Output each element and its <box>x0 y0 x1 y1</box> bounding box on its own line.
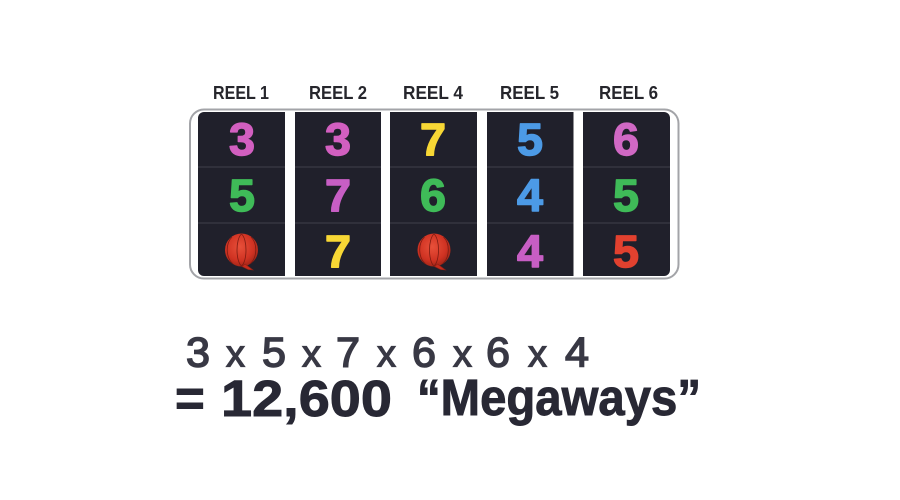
label: reel 2: REEL 2 <box>309 83 367 103</box>
equation: multiplication line: 6 <box>486 328 510 376</box>
label: reel 1: REEL 1 <box>213 83 269 103</box>
equation: multiplication line: x <box>528 334 547 376</box>
equation: multiplication line: x <box>226 334 245 376</box>
equation: multiplication line: x <box>302 334 321 376</box>
panel: reel 5 <box>487 112 574 277</box>
symbol: green 6: 6 <box>420 170 446 221</box>
equation: result line: 12,600 <box>221 370 392 427</box>
icon: red Q ball <box>225 234 258 270</box>
label: reel 5: REEL 5 <box>500 83 559 103</box>
equation: result line <box>175 369 701 427</box>
symbol: pink 3: 3 <box>325 114 351 165</box>
symbol: purple 7: 7 <box>325 170 351 221</box>
symbol: blue 4: 4 <box>517 170 543 221</box>
panel: reel 1 <box>198 112 285 276</box>
label: reel 6: REEL 6 <box>599 83 658 103</box>
equation: result line: “Megaways” <box>417 369 701 426</box>
equation: multiplication line: x <box>453 334 472 376</box>
symbol: blue 5: 5 <box>517 114 543 165</box>
symbol: yellow 7: 7 <box>420 114 446 165</box>
equation: multiplication line <box>186 328 589 376</box>
symbol: green 5: 5 <box>229 170 255 221</box>
equation: multiplication line: x <box>377 334 396 376</box>
equation: multiplication line: 6 <box>412 328 436 376</box>
equation: multiplication line: 5 <box>262 328 286 376</box>
reel labels <box>213 83 658 103</box>
symbol: pink 6: 6 <box>613 114 639 165</box>
equation: multiplication line: 4 <box>565 328 589 376</box>
panel: reel 2 <box>295 112 381 277</box>
symbol: purple 4: 4 <box>517 226 543 277</box>
symbol: yellow 7: 7 <box>325 226 351 277</box>
equation: result line: = <box>175 370 205 427</box>
panel: reel 4 <box>390 112 477 276</box>
symbol: red 5: 5 <box>613 226 639 277</box>
equation: multiplication line: 7 <box>336 328 360 376</box>
label: reel 4: REEL 4 <box>403 83 463 103</box>
symbol: pink 3: 3 <box>229 114 255 165</box>
symbol: green 5: 5 <box>613 170 639 221</box>
equation: multiplication line: 3 <box>186 328 210 376</box>
panel: reel 6 <box>583 112 670 277</box>
icon: red Q ball <box>418 234 450 270</box>
slot machine frame <box>190 110 678 278</box>
